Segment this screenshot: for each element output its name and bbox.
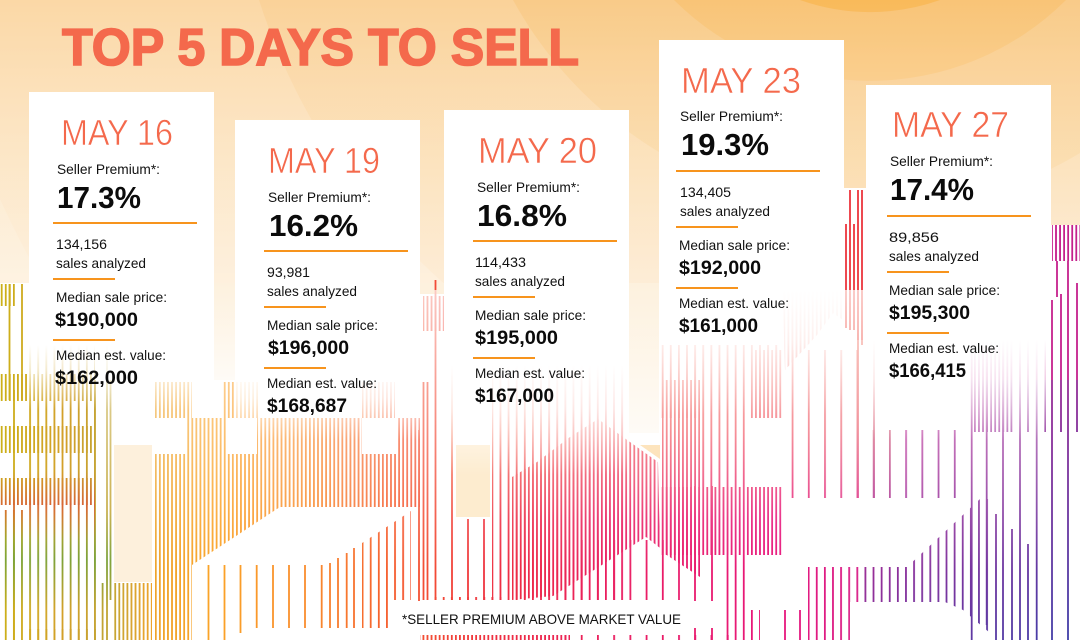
panel: May 20: 114,433	[475, 254, 526, 270]
panel: May 20: 16.8%	[477, 198, 567, 233]
panel: May 23: Median est. value:	[679, 295, 789, 311]
panel: May 23: 19.3%	[681, 127, 769, 162]
panel: May 20: $195,000	[475, 328, 558, 349]
panel: May 16: Median sale price:	[56, 289, 167, 305]
panel: May 27: 89,856	[889, 229, 939, 245]
panel: May 27: Median sale price:	[889, 282, 1000, 298]
panel: May 20: sales analyzed	[475, 273, 565, 289]
panel: May 19: Median est. value:	[267, 375, 377, 391]
panel: May 19: Seller Premium*:	[268, 189, 371, 205]
panel: May 27: $166,415	[889, 361, 966, 382]
panel: May 19: sales analyzed	[267, 283, 357, 299]
panel: May 27: Seller Premium*:	[890, 153, 993, 169]
white ground below the peach background	[0, 188, 1080, 640]
footnote band: *SELLER PREMIUM ABOVE MARKET VALUE	[402, 611, 681, 627]
panel: May 27: $195,300	[889, 303, 970, 324]
panel: May 27: 17.4%	[890, 172, 974, 207]
panel: May 20: Median sale price:	[475, 307, 586, 323]
panel: May 23: $161,000	[679, 316, 758, 337]
panel: May 16: sales analyzed	[56, 255, 146, 271]
panel: May 16: MAY 16	[61, 112, 173, 153]
panel: May 23	[659, 40, 844, 415]
panel: May 20: MAY 20	[478, 130, 597, 171]
panel: May 19: 16.2%	[269, 208, 358, 243]
panel: May 20: Median est. value:	[475, 365, 585, 381]
panel: May 16: 17.3%	[57, 180, 141, 215]
panel: May 27: sales analyzed	[889, 248, 979, 264]
panel: May 23: Seller Premium*:	[680, 108, 783, 124]
panel: May 16	[29, 92, 214, 410]
panel: May 16: $162,000	[55, 368, 138, 389]
footnote band	[388, 601, 718, 628]
panel: May 19	[235, 120, 420, 440]
panel: May 27: Median est. value:	[889, 340, 999, 356]
panel: May 23: 134,405	[680, 184, 731, 200]
panel: May 19: $168,687	[267, 396, 347, 417]
panel: May 19: $196,000	[268, 338, 349, 359]
panel: May 23: sales analyzed	[680, 203, 770, 219]
panel: May 20: Seller Premium*:	[477, 179, 580, 195]
panel: May 20	[444, 110, 629, 475]
panel: May 20: $167,000	[475, 386, 554, 407]
panel: May 16: 134,156	[56, 236, 107, 252]
panel: May 19: MAY 19	[268, 140, 380, 181]
panel: May 16: Median est. value:	[56, 347, 166, 363]
title: TOP 5 DAYS TO SELL	[62, 19, 579, 77]
panel: May 19: Median sale price:	[267, 317, 378, 333]
panel: May 19: 93,981	[267, 264, 310, 280]
striped vertical bars	[0, 190, 1080, 640]
panel: May 23: $192,000	[679, 258, 761, 279]
panel: May 23: Median sale price:	[679, 237, 790, 253]
panel: May 27	[866, 85, 1051, 440]
panel: May 16: $190,000	[55, 310, 138, 331]
panel: May 27: MAY 27	[892, 104, 1009, 145]
panel: May 16: Seller Premium*:	[57, 161, 160, 177]
panel: May 23: MAY 23	[681, 60, 801, 101]
